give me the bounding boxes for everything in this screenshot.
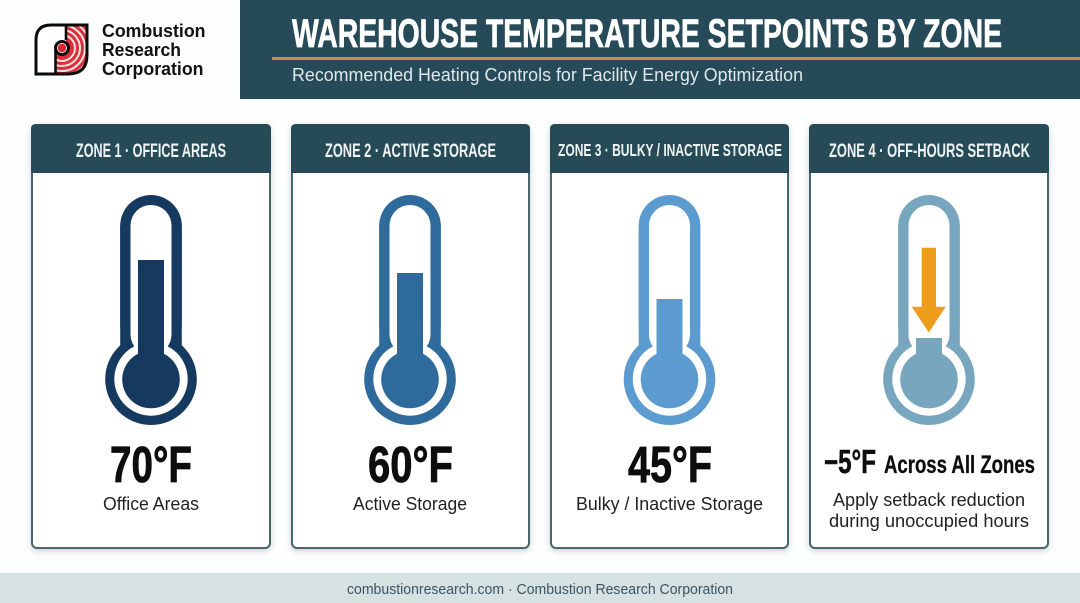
label: setback note: Apply setback reduction <box>833 490 1025 510</box>
logo wordmark: Combustion <box>102 20 206 41</box>
icon: thermometer 60F <box>364 195 456 425</box>
label: setback note: during unoccupied hours <box>829 511 1029 531</box>
label: bulky inactive storage: Bulky / Inactive Storage <box>576 494 763 514</box>
logo wordmark <box>102 20 206 79</box>
logo wordmark: Corporation <box>102 58 204 79</box>
footer: combustionresearch.com · Combustion Research Corporation <box>347 582 733 598</box>
arrow: downward setback <box>912 248 946 332</box>
label: active storage: Active Storage <box>353 494 467 514</box>
logo: Combustion Research Corporation <box>34 24 204 79</box>
icon: logo mark <box>34 24 88 76</box>
logo wordmark: Research <box>102 39 181 60</box>
value: 70F: 70°F <box>110 436 192 493</box>
footer <box>0 573 1080 603</box>
icon: thermometer 45F <box>624 195 715 425</box>
value: 60F: 60°F <box>368 436 453 493</box>
zone 2 heading <box>291 124 530 173</box>
label: setback note <box>829 490 1029 531</box>
zone 3 heading <box>550 124 789 173</box>
panel: zone 4 off-hours setback <box>809 124 1049 548</box>
value: 45F: 45°F <box>628 436 712 493</box>
zone 3 heading: ZONE 3 · BULKY / INACTIVE STORAGE <box>558 140 782 160</box>
zone 4 heading <box>809 124 1049 173</box>
icon: thermometer setback <box>883 195 975 425</box>
label: office areas: Office Areas <box>103 494 199 514</box>
zone 1 heading <box>31 124 271 173</box>
icon: thermometer 70F <box>105 195 197 425</box>
value: minus 5F across all zones <box>824 443 1035 480</box>
accent rule <box>272 57 1080 60</box>
value: minus 5F across all zones: −5°F <box>824 443 876 480</box>
panel: zone 3 bulky inactive storage <box>550 124 789 548</box>
subtitle: Recommended Heating Controls for Facility Energy Optimization <box>292 65 803 85</box>
header banner <box>240 0 1080 99</box>
zone 1 heading: ZONE 1 · OFFICE AREAS <box>76 141 226 162</box>
panel: zone 2 active storage <box>291 124 530 548</box>
zone 2 heading: ZONE 2 · ACTIVE STORAGE <box>325 141 496 162</box>
panel: zone 1 office areas <box>31 124 271 548</box>
